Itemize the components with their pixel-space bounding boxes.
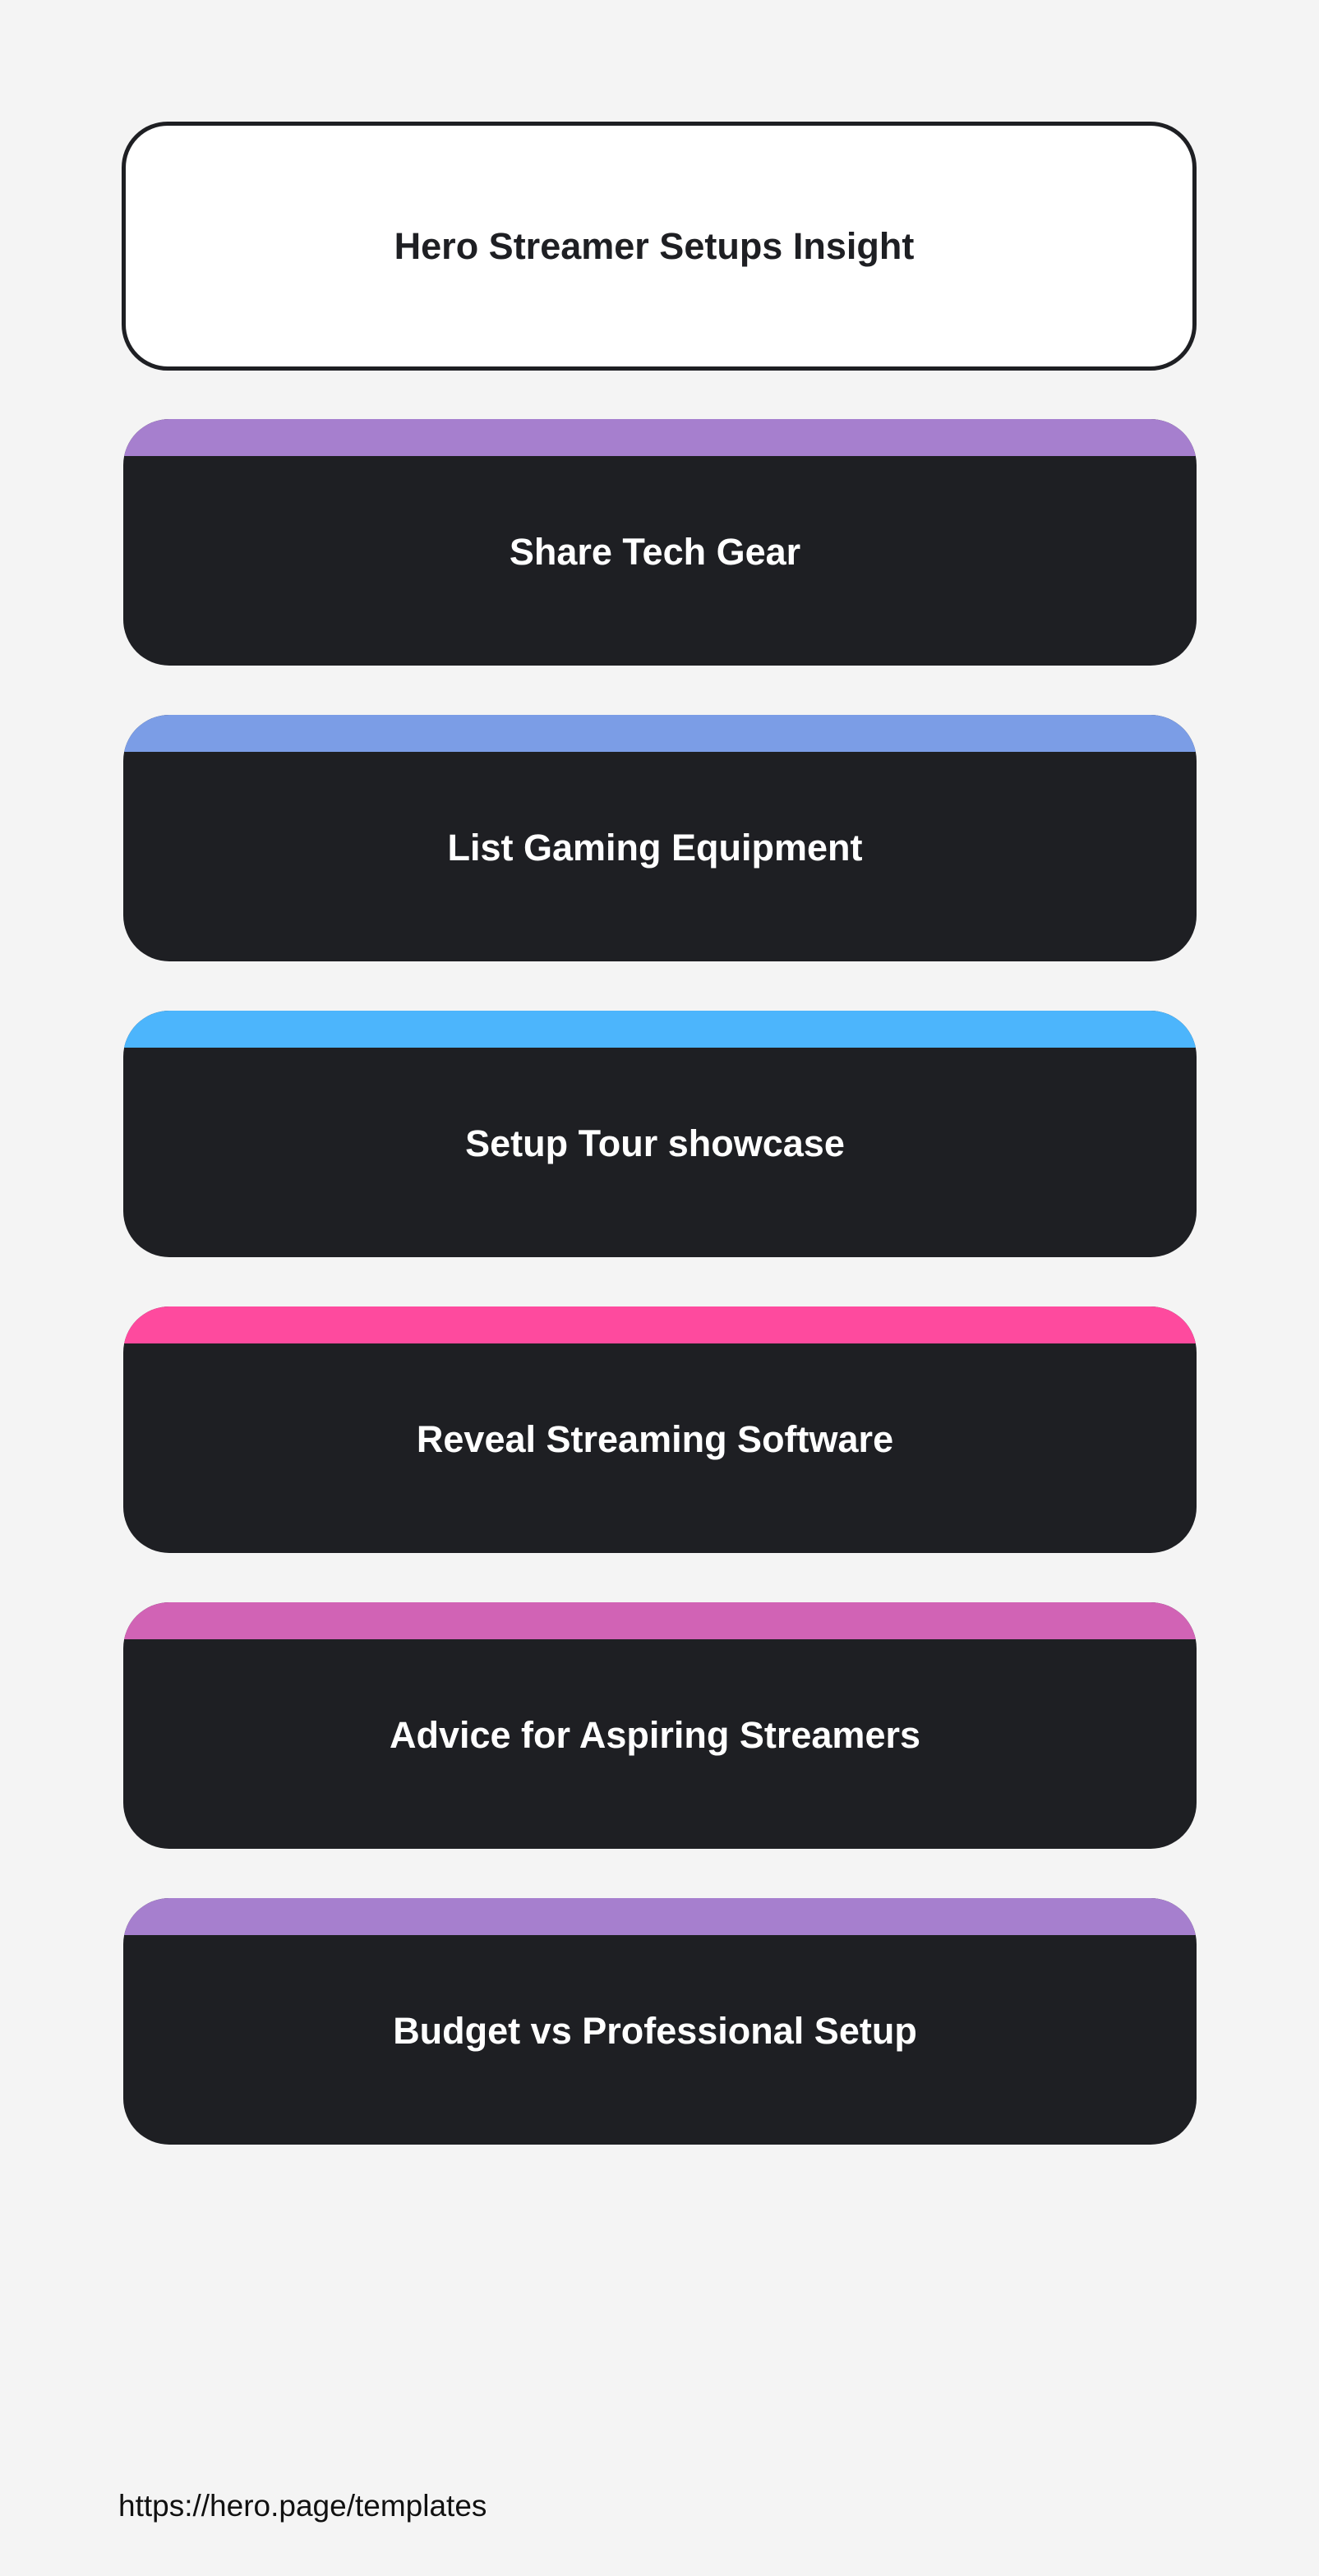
title box bbox=[122, 122, 1197, 371]
card text: Advice for Aspiring Streamers bbox=[390, 1714, 920, 1756]
color strip bbox=[123, 419, 1197, 456]
card text: Reveal Streaming Software bbox=[417, 1418, 893, 1460]
card: Advice for Aspiring Streamers bbox=[123, 1602, 1197, 1849]
card: List Gaming Equipment bbox=[123, 715, 1197, 961]
footer url: https://hero.page/templates bbox=[118, 2489, 487, 2523]
card: Share Tech Gear bbox=[123, 419, 1197, 666]
card: Budget vs Professional Setup bbox=[123, 1898, 1197, 2145]
color strip bbox=[123, 1898, 1197, 1935]
card text: Share Tech Gear bbox=[510, 531, 800, 573]
card text: List Gaming Equipment bbox=[447, 827, 863, 869]
color strip bbox=[123, 1011, 1197, 1048]
title box: Hero Streamer Setups Insight bbox=[394, 225, 914, 266]
card: Reveal Streaming Software bbox=[123, 1306, 1197, 1553]
color strip bbox=[123, 1306, 1197, 1343]
card: Setup Tour showcase bbox=[123, 1011, 1197, 1257]
card text: Budget vs Professional Setup bbox=[393, 2010, 917, 2052]
color strip bbox=[123, 1602, 1197, 1639]
card text: Setup Tour showcase bbox=[465, 1122, 845, 1164]
color strip bbox=[123, 715, 1197, 752]
